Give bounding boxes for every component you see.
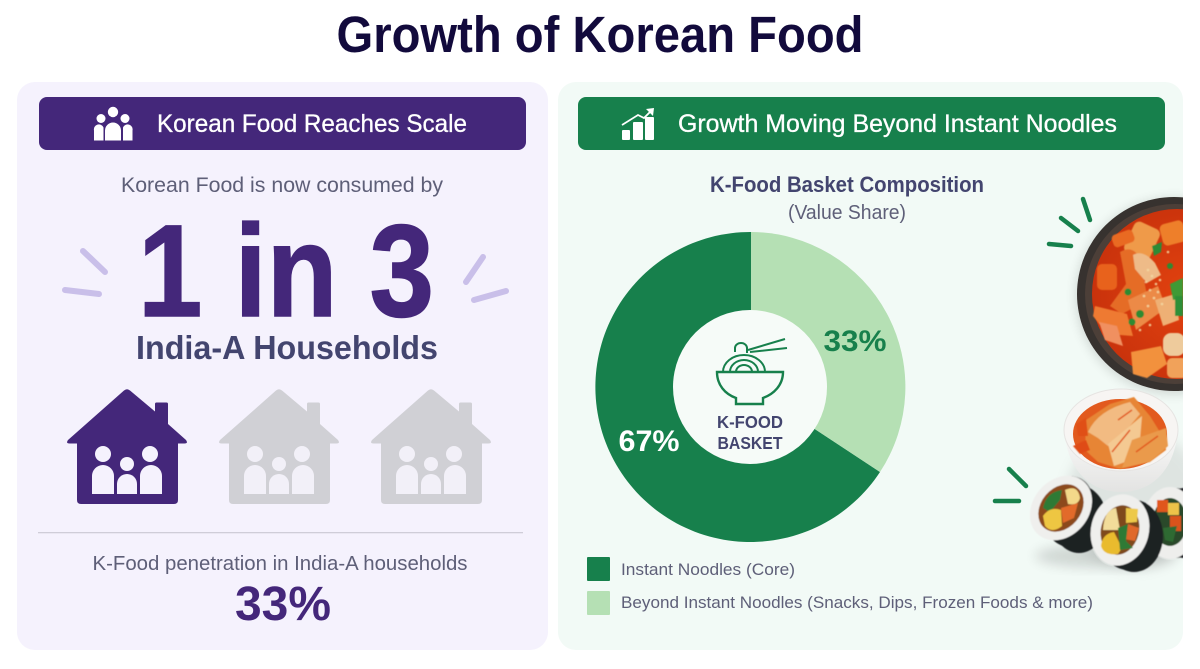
icon: house grey 1 [219,389,339,504]
legend [587,557,1093,615]
roll 2 [1090,494,1164,573]
food photos [1030,194,1183,574]
chart title: K-Food Basket Composition [710,172,984,197]
panel header: right [578,97,1165,150]
roll 3 [1146,487,1183,560]
penetration value: 33% [235,578,331,631]
legend: Instant Noodles (Core) [621,560,795,579]
penetration label: K-Food penetration in India-A households [92,553,468,575]
segment: Beyond Instant Noodles 33% [751,232,905,472]
chart title [710,172,984,224]
center label: K-FOOD [717,412,783,432]
value: 67%: 67% [618,425,680,458]
panel header: left [39,97,526,150]
subheading: India-A Households [136,329,438,366]
roll 1 [1030,476,1104,554]
icon: house grey 2 [371,389,491,504]
value: 33%: 33% [824,325,886,358]
big stat: 1 in 3: 1 in 3 [138,197,434,344]
header text: Growth Moving Beyond Instant Noodles [678,110,1117,138]
center label [717,412,783,453]
food: kimbap rolls [1030,476,1183,573]
panel: Growth Moving Beyond Instant Noodles [558,82,1200,650]
soft shadow [1068,442,1183,571]
icon: growth chart [622,108,654,140]
donut chart [595,232,905,542]
segment: Instant Noodles 67% [595,232,880,542]
intro text: Korean Food is now consumed by [121,174,444,197]
food: kimchi bowl [1064,389,1178,492]
accent ticks bottom [995,469,1026,501]
header text: Korean Food Reaches Scale [157,110,467,138]
icon: noodle bowl [717,339,787,404]
icon: house filled [67,389,187,504]
panel: Korean Food Reaches Scale [17,82,548,650]
icon: people group [94,107,133,140]
accent ticks top [1049,199,1090,246]
legend: Beyond Instant Noodles (Snacks, Dips, Frozen Foods & more) [621,593,1093,612]
food: tteokbokki bowl [1077,197,1200,393]
accent strokes left [65,251,105,294]
title: Growth of Korean Food [336,6,864,63]
center label: BASKET [718,433,783,453]
chart title: (Value Share) [788,202,906,224]
accent strokes right [466,257,506,300]
